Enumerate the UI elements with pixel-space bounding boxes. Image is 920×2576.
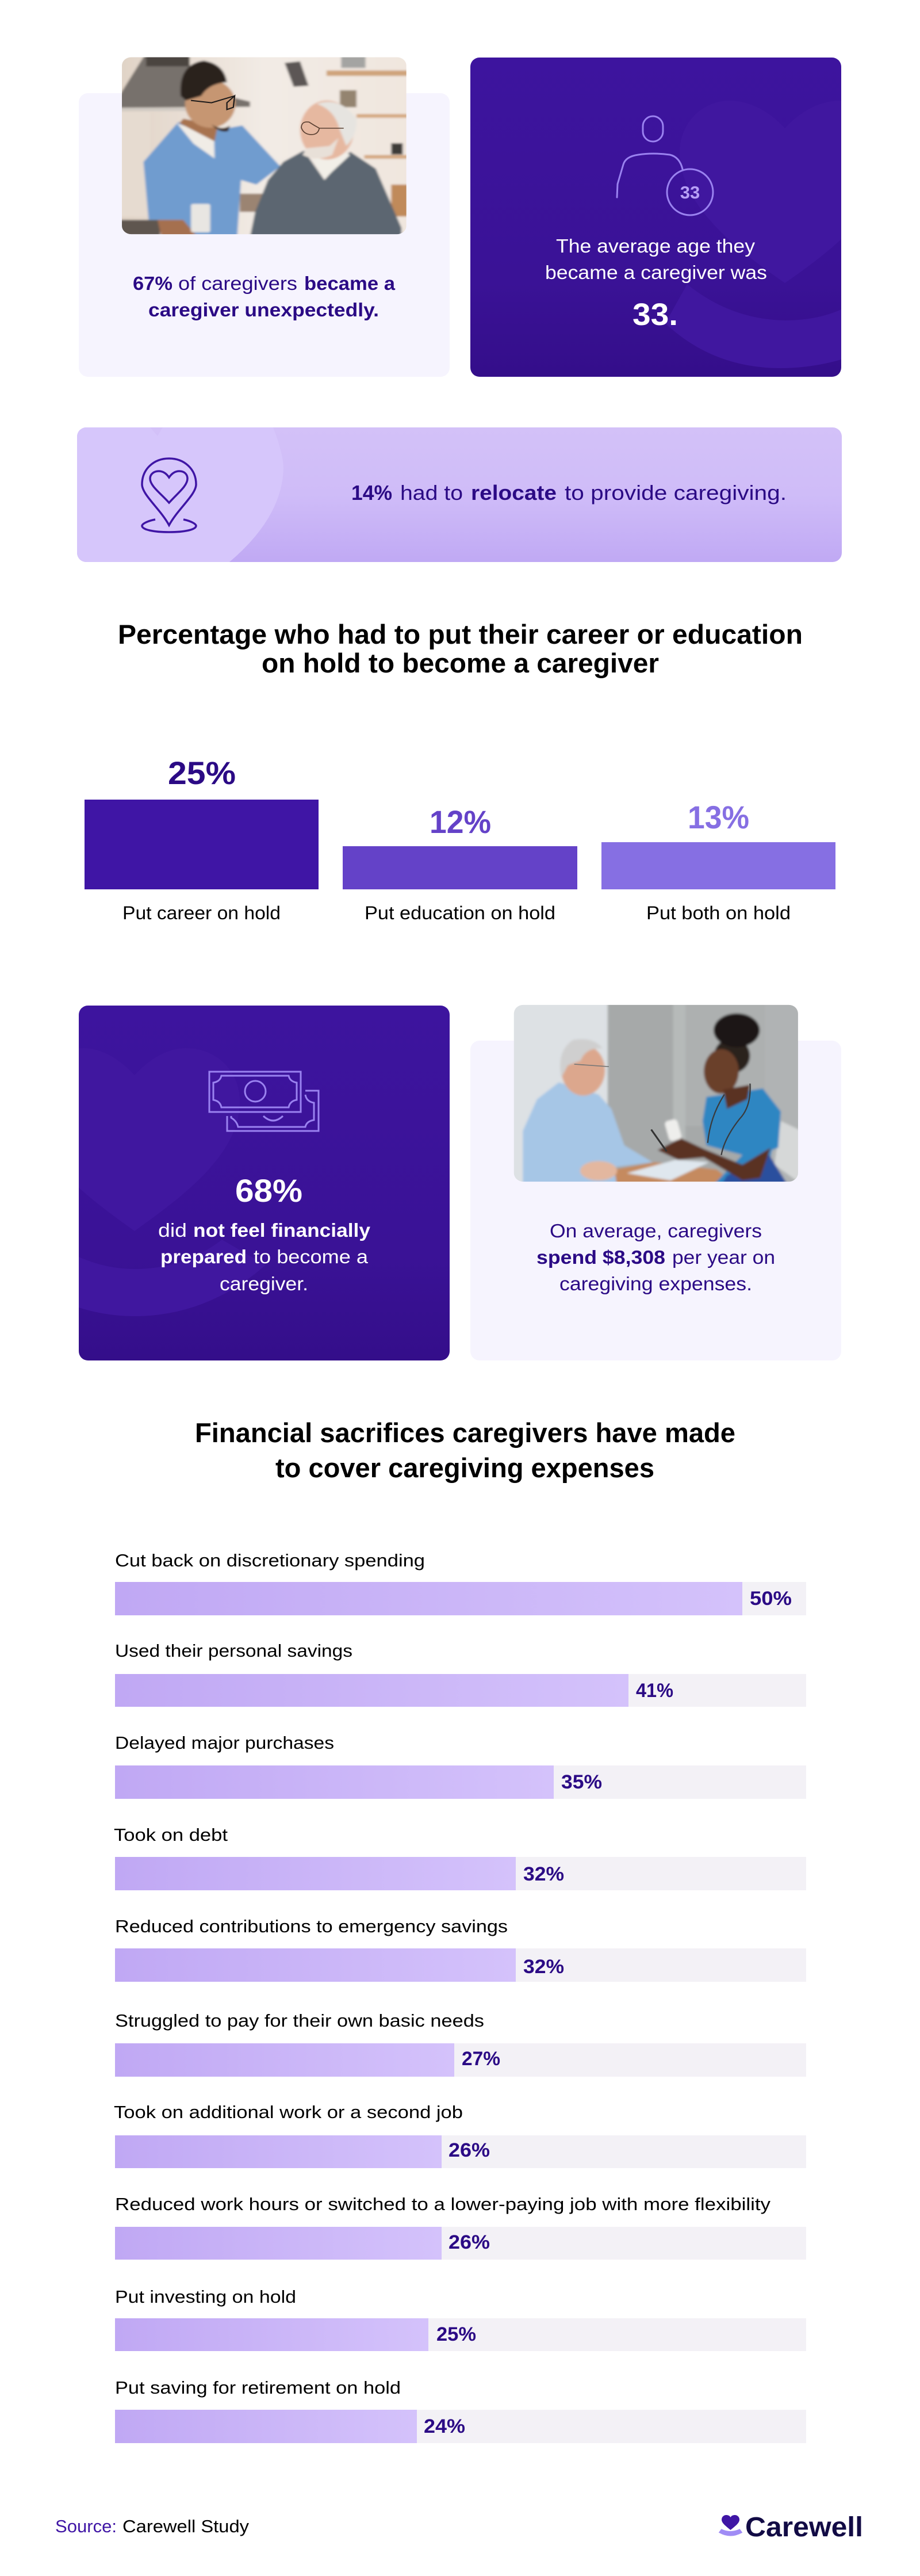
row: used their personal savings: Used their personal savings	[115, 1641, 352, 1661]
panel: 14% relocated	[77, 427, 842, 562]
bar: put education on hold: Put education on hold	[365, 903, 555, 923]
row: additional work or second job	[114, 2102, 806, 2168]
text: 68% statement: prepared	[160, 1246, 247, 1267]
card background	[470, 1041, 841, 1360]
row: put investing on hold: 25%	[436, 2323, 476, 2345]
heading: career or education on hold	[118, 619, 803, 678]
text: relocate statement	[351, 481, 787, 505]
bar: put both on hold	[601, 799, 835, 923]
text: average spend statement: caregiving expenses.	[559, 1273, 752, 1294]
row: struggled to pay for basic needs: Struggled to pay for their own basic needs	[115, 2011, 484, 2031]
bar: put both on hold: Put both on hold	[646, 903, 791, 923]
row: reduced contributions to emergency savings: Reduced contributions to emergency savings	[115, 1916, 508, 1936]
row: used their personal savings	[115, 1641, 806, 1707]
row: reduced work hours: Reduced work hours or switched to a lower-paying job with more flexibility	[115, 2194, 771, 2214]
text: 67% became caregiver unexpectedly: caregiver unexpectedly.	[148, 299, 379, 320]
source note: Source:	[55, 2516, 117, 2536]
source note: Carewell Study	[122, 2516, 250, 2536]
heading: financial sacrifices	[195, 1417, 735, 1483]
bar: put both on hold: 13%	[688, 799, 749, 835]
text: 68% statement: 68%	[235, 1172, 302, 1209]
row: struggled to pay for basic needs: 27%	[462, 2048, 500, 2070]
text: average age statement: became a caregiver was	[545, 262, 767, 283]
bar: put career on hold: 25%	[168, 755, 236, 791]
bar: put career on hold	[85, 755, 319, 923]
row: put saving for retirement on hold: 24%	[424, 2416, 465, 2437]
row: delayed major purchases	[115, 1733, 806, 1799]
panel: average age 33	[470, 58, 841, 377]
logo: Carewell: Carewell	[745, 2512, 863, 2543]
bar: put career on hold: Put career on hold	[122, 903, 281, 923]
icon: banknotes	[209, 1072, 319, 1131]
text: average spend statement	[536, 1220, 775, 1294]
panel: $8,308 yearly expenses	[470, 1003, 841, 1360]
row: reduced contributions to emergency savings	[115, 1916, 806, 1982]
row: additional work or second job: Took on additional work or a second job	[114, 2102, 463, 2122]
source note	[55, 2516, 250, 2536]
icon: person with age badge	[617, 116, 713, 215]
text: relocate statement: relocate	[471, 481, 557, 505]
heading: career or education on hold: Percentage who had to put their career or education	[118, 619, 803, 649]
row: took on debt: Took on debt	[114, 1825, 228, 1845]
text: average spend statement: On average, caregivers	[550, 1220, 762, 1241]
text: 67% became caregiver unexpectedly: of caregivers	[178, 273, 297, 294]
bar chart: career or education on hold	[85, 755, 835, 923]
text: 67% became caregiver unexpectedly: became a	[304, 273, 396, 294]
row: put saving for retirement on hold	[115, 2378, 806, 2443]
card background	[79, 1006, 450, 1360]
banner background	[77, 427, 842, 562]
text: 67% became caregiver unexpectedly: 67%	[133, 273, 172, 294]
text: 68% statement: did	[158, 1220, 187, 1241]
text: 68% statement: caregiver.	[220, 1273, 308, 1294]
row: reduced work hours: 26%	[448, 2231, 490, 2253]
row: took on debt: 32%	[523, 1863, 564, 1885]
text: relocate statement: to provide caregiving.	[565, 481, 787, 505]
text: average age statement: 33.	[632, 297, 678, 332]
row: additional work or second job: 26%	[448, 2139, 490, 2161]
text: average age statement: The average age they	[556, 235, 756, 257]
row: delayed major purchases: Delayed major purchases	[115, 1733, 334, 1753]
text: 68% statement: to become a	[254, 1246, 369, 1267]
card background	[79, 93, 450, 377]
text: average age statement	[545, 235, 767, 332]
heading: career or education on hold: on hold to become a caregiver	[262, 648, 659, 678]
text: relocate statement: had to	[400, 481, 463, 505]
text: 68% statement	[158, 1172, 371, 1294]
photo: nurse with older patient	[511, 1003, 802, 1184]
icon: person with age badge: 33	[680, 182, 700, 202]
card background	[470, 58, 841, 377]
heading: financial sacrifices: to cover caregiving expenses	[275, 1453, 654, 1483]
row: put saving for retirement on hold: Put saving for retirement on hold	[115, 2378, 401, 2398]
bar: put education on hold: 12%	[430, 804, 491, 840]
panel: 68% not financially prepared	[79, 1006, 450, 1360]
row: cut back on discretionary spending: Cut back on discretionary spending	[115, 1550, 425, 1570]
photo: caregiver with older man	[119, 55, 409, 237]
text: 67% became caregiver unexpectedly	[133, 273, 396, 320]
text: relocate statement: 14%	[351, 481, 392, 505]
row: reduced contributions to emergency savings: 32%	[523, 1956, 564, 1978]
row: reduced work hours	[115, 2194, 806, 2260]
bar: put education on hold	[343, 804, 577, 923]
row: cut back on discretionary spending: 50%	[750, 1588, 792, 1610]
row: took on debt	[114, 1825, 806, 1890]
text: 68% statement: not feel financially	[193, 1220, 371, 1241]
row: delayed major purchases: 35%	[561, 1771, 602, 1793]
text: average spend statement: per year on	[672, 1247, 775, 1268]
row: struggled to pay for basic needs	[115, 2011, 806, 2077]
row: used their personal savings: 41%	[636, 1680, 673, 1702]
row: cut back on discretionary spending	[115, 1550, 806, 1615]
row: put investing on hold: Put investing on hold	[115, 2287, 296, 2307]
icon: map pin with heart	[142, 458, 196, 532]
text: average spend statement: spend $8,308	[536, 1247, 665, 1268]
panel: 67% unexpected caregivers	[79, 55, 450, 377]
row: put investing on hold	[115, 2287, 806, 2351]
bar chart: financial sacrifices	[114, 1550, 806, 2443]
heading: financial sacrifices: Financial sacrifices caregivers have made	[195, 1417, 735, 1448]
